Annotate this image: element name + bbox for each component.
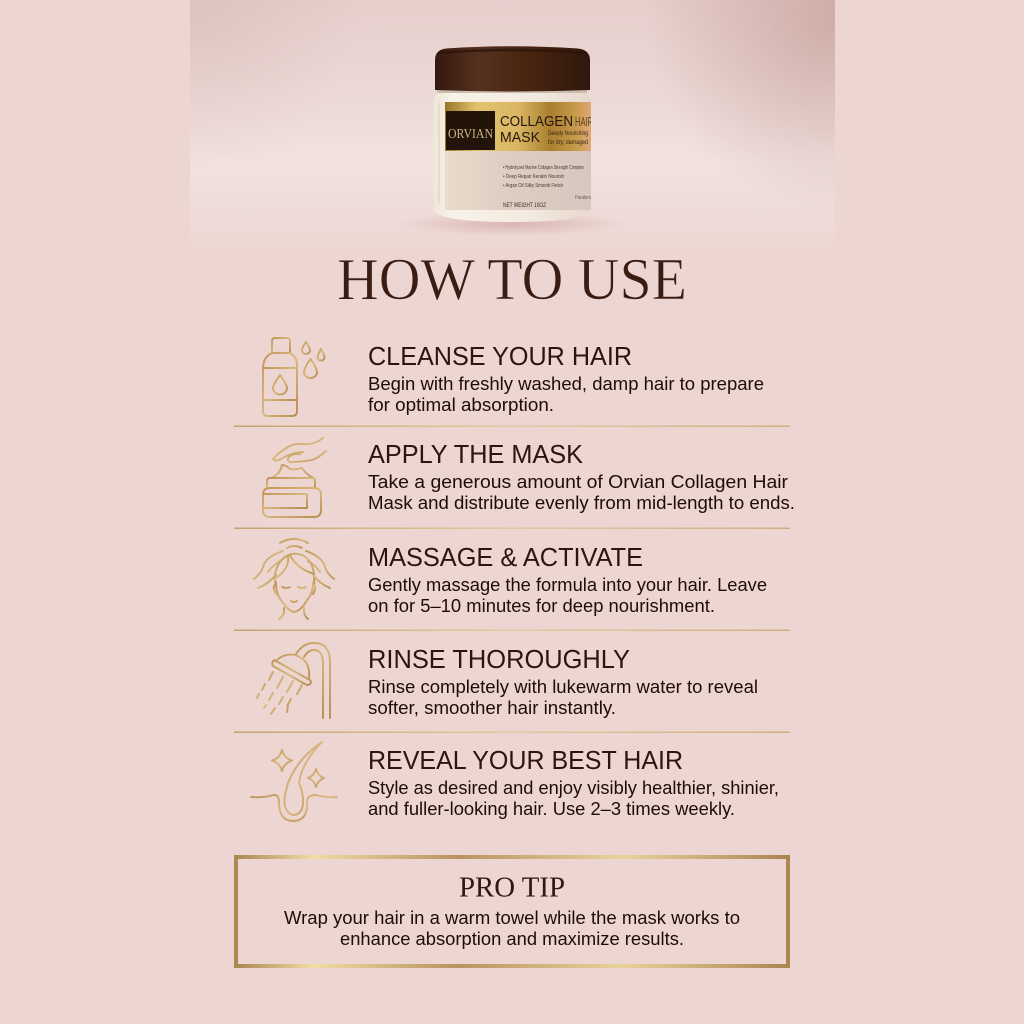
- panel: pro tip: Wrap your hair in a warm towel while the mask works to: [284, 907, 740, 928]
- divider: [234, 528, 790, 529]
- product jar: MASK: [500, 129, 540, 146]
- divider: [234, 732, 790, 733]
- hero backdrop: [190, 0, 835, 262]
- icon: shampoo bottle with drops: [263, 338, 324, 416]
- step 1 text: [368, 341, 764, 415]
- step 2 text: Take a generous amount of Orvian Collagen Hair: [368, 471, 788, 492]
- product jar: [423, 46, 602, 234]
- step 2 text: APPLY THE MASK: [368, 439, 584, 469]
- product jar: Deeply Nourishing: [548, 130, 588, 137]
- product jar: • Hydrolyzed Marine Collagen Strength Complex: [503, 165, 584, 171]
- step 4 text: Rinse completely with lukewarm water to reveal: [368, 676, 758, 697]
- step 4 text: [368, 644, 758, 718]
- title: HOW TO USE: [337, 246, 687, 312]
- product jar: Paraben: [575, 195, 591, 201]
- step 1 text: for optimal absorption.: [368, 394, 554, 415]
- icon: hand over cream jar: [263, 438, 326, 517]
- panel: pro tip: enhance absorption and maximize results.: [340, 928, 684, 949]
- panel: pro tip: [236, 857, 788, 966]
- step 1 text: CLEANSE YOUR HAIR: [368, 341, 632, 371]
- product jar: for dry, damaged: [548, 139, 588, 146]
- step 3 text: on for 5–10 minutes for deep nourishment.: [368, 595, 715, 616]
- product jar: COLLAGEN: [500, 113, 573, 130]
- divider: [234, 426, 790, 427]
- product jar: • Argan Oil Silky Smooth Finish: [503, 183, 563, 189]
- step 5 text: REVEAL YOUR BEST HAIR: [368, 745, 683, 775]
- step 4 text: softer, smoother hair instantly.: [368, 697, 616, 718]
- step 2 text: Mask and distribute evenly from mid-length to ends.: [368, 492, 795, 513]
- panel: pro tip: PRO TIP: [459, 872, 565, 904]
- icon: hair strand with sparkles: [251, 742, 337, 821]
- step 1 text: Begin with freshly washed, damp hair to prepare: [368, 373, 764, 394]
- step 5 text: [368, 745, 779, 819]
- step 4 text: RINSE THOROUGHLY: [368, 644, 630, 674]
- icon: head massage: [254, 539, 334, 619]
- product jar: NET WEIGHT 10OZ: [503, 203, 546, 209]
- step 3 text: Gently massage the formula into your hair. Leave: [368, 574, 767, 595]
- step 5 text: Style as desired and enjoy visibly healthier, shinier,: [368, 777, 779, 798]
- product jar: HAIR: [575, 114, 593, 129]
- product jar: ORVIAN: [448, 127, 493, 142]
- product jar: • Deep Repair Keratin Nourish: [503, 174, 564, 180]
- icon: shower head: [257, 643, 330, 718]
- step 2 text: [368, 439, 795, 513]
- step 3 text: [368, 542, 767, 616]
- step 5 text: and fuller-looking hair. Use 2–3 times weekly.: [368, 798, 735, 819]
- step 3 text: MASSAGE & ACTIVATE: [368, 542, 643, 572]
- divider: [234, 630, 790, 631]
